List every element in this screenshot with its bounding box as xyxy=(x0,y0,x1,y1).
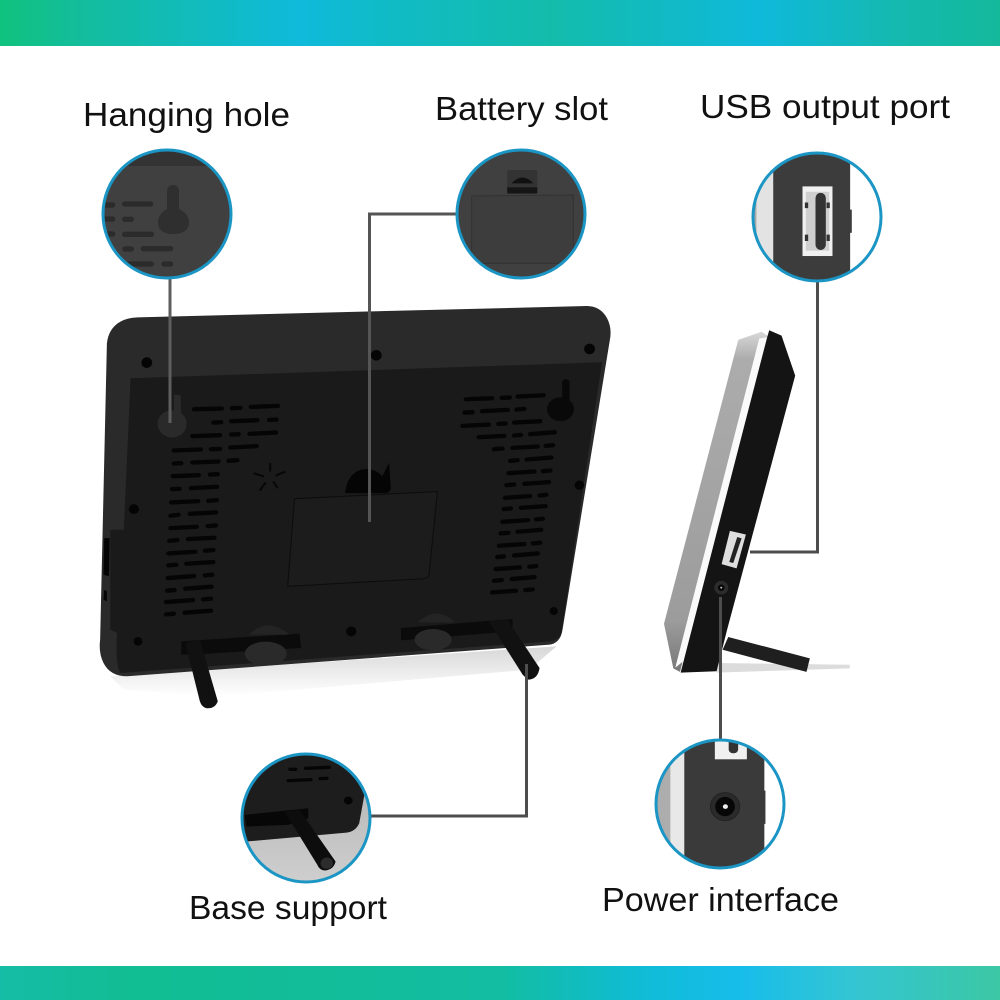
usb port xyxy=(803,186,832,256)
leader line: power interface xyxy=(719,597,722,741)
heading: battery slot: Battery slot xyxy=(435,90,608,127)
power jack xyxy=(710,793,740,821)
stand cap xyxy=(321,858,333,869)
bottom gradient banner xyxy=(0,966,1000,1000)
star vent xyxy=(254,463,285,490)
callout: hanging hole xyxy=(100,150,235,280)
silver edge xyxy=(658,766,670,842)
power jack xyxy=(714,581,728,594)
callout: base support xyxy=(237,750,375,885)
heading: usb output port: USB output port xyxy=(700,88,950,125)
leader line: hanging hole xyxy=(168,278,172,423)
heading: base support: Base support xyxy=(189,889,387,926)
device side view xyxy=(664,330,850,673)
dark body xyxy=(684,737,764,870)
callout: usb output port xyxy=(750,150,885,285)
leader line: usb port xyxy=(750,282,818,552)
black rear body xyxy=(681,330,795,673)
left base knob xyxy=(245,626,289,666)
inner recessed panel xyxy=(110,362,602,673)
latch xyxy=(507,170,537,194)
battery latch xyxy=(345,463,391,493)
right stand leg xyxy=(489,620,540,680)
left keyhole hanging slot xyxy=(158,395,187,438)
right vent slots xyxy=(462,395,555,592)
usb port end xyxy=(714,742,747,760)
silver screen face xyxy=(664,332,768,672)
device back view xyxy=(100,306,611,708)
heading: hanging hole: Hanging hole xyxy=(83,96,290,133)
screw holes xyxy=(129,344,595,646)
right base rail xyxy=(401,619,512,640)
callout: power interface xyxy=(652,736,788,872)
top gradient banner xyxy=(0,0,1000,46)
right keyhole hanging slot xyxy=(547,379,574,421)
keyhole xyxy=(158,185,189,234)
left base rail xyxy=(181,634,301,655)
battery cover outline xyxy=(472,195,573,263)
heading: power interface: Power interface xyxy=(602,881,839,918)
vent slots xyxy=(288,767,329,781)
screw xyxy=(344,797,353,805)
vent slots xyxy=(105,204,171,264)
callout: battery slot xyxy=(456,148,586,280)
left stand leg xyxy=(185,640,218,708)
stand xyxy=(292,819,336,870)
side ports xyxy=(104,538,110,601)
right base knob xyxy=(414,614,455,650)
left vent slots xyxy=(166,406,278,614)
usb port xyxy=(722,531,746,568)
stand xyxy=(723,637,810,672)
device corner xyxy=(244,756,364,842)
device shell xyxy=(100,306,611,676)
table shadow xyxy=(717,663,850,673)
leader line: base support xyxy=(370,664,526,816)
floor shadow xyxy=(110,646,556,696)
leader line: battery slot xyxy=(370,214,457,522)
white bezel strip xyxy=(675,337,767,668)
battery cover xyxy=(288,491,437,586)
dark body xyxy=(773,151,850,283)
silver edge xyxy=(754,202,756,232)
rail xyxy=(245,808,308,827)
